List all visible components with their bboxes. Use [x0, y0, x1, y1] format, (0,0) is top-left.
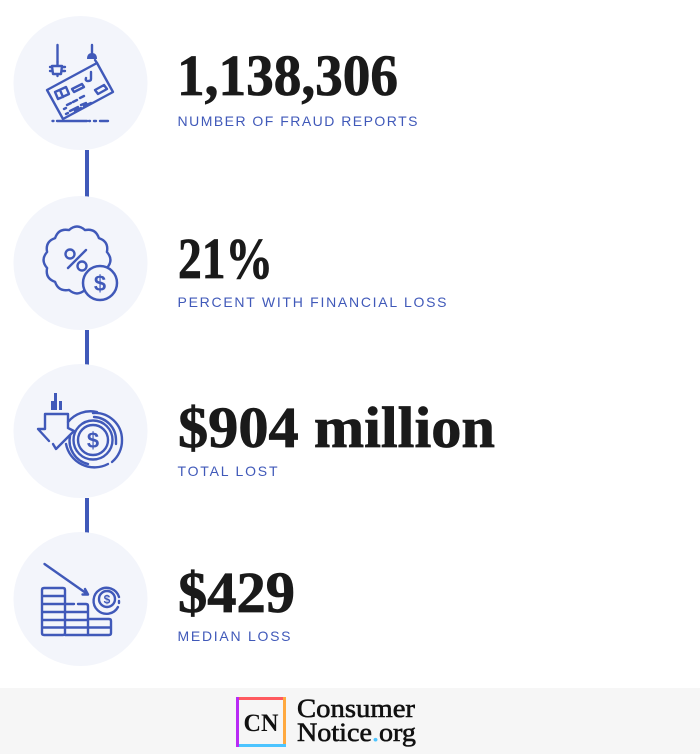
label: number of fraud reports: NUMBER OF FRAUD REPORTS — [178, 113, 418, 129]
stat: 1,138,306: 1,138,306 — [177, 43, 398, 108]
label: total lost: TOTAL LOST — [178, 463, 278, 479]
label: percent with financial loss: PERCENT WITH FINANCIAL LOSS — [178, 294, 446, 310]
logo wordmark: Notice.org — [297, 718, 416, 747]
panel: median loss — [14, 532, 295, 666]
footer band — [0, 688, 700, 754]
icon: percent badge with dollar coin: $ — [94, 271, 106, 296]
panel: fraud reports — [14, 16, 418, 150]
panel: financial loss — [14, 196, 446, 330]
panel: total lost — [14, 364, 495, 498]
icon: down arrow with dollar coin — [14, 364, 148, 498]
logo wordmark — [297, 694, 416, 747]
icon: declining coin stacks — [14, 532, 148, 666]
icon: declining coin stacks: $ — [104, 592, 111, 606]
connector lines — [85, 150, 89, 534]
logo: CN square: CN — [244, 710, 278, 737]
icon: down arrow with dollar coin: $ — [87, 428, 99, 453]
icon: hooked credit card — [14, 16, 148, 150]
stat: $904 million: $904 million — [178, 395, 495, 460]
stat: $429: $429 — [178, 560, 295, 625]
logo: CN square — [236, 697, 286, 747]
logo wordmark: Consumer — [297, 694, 415, 723]
label: median loss: MEDIAN LOSS — [178, 628, 290, 644]
icon: percent badge with dollar coin — [14, 196, 148, 330]
stat: 21%: 21% — [178, 226, 273, 291]
